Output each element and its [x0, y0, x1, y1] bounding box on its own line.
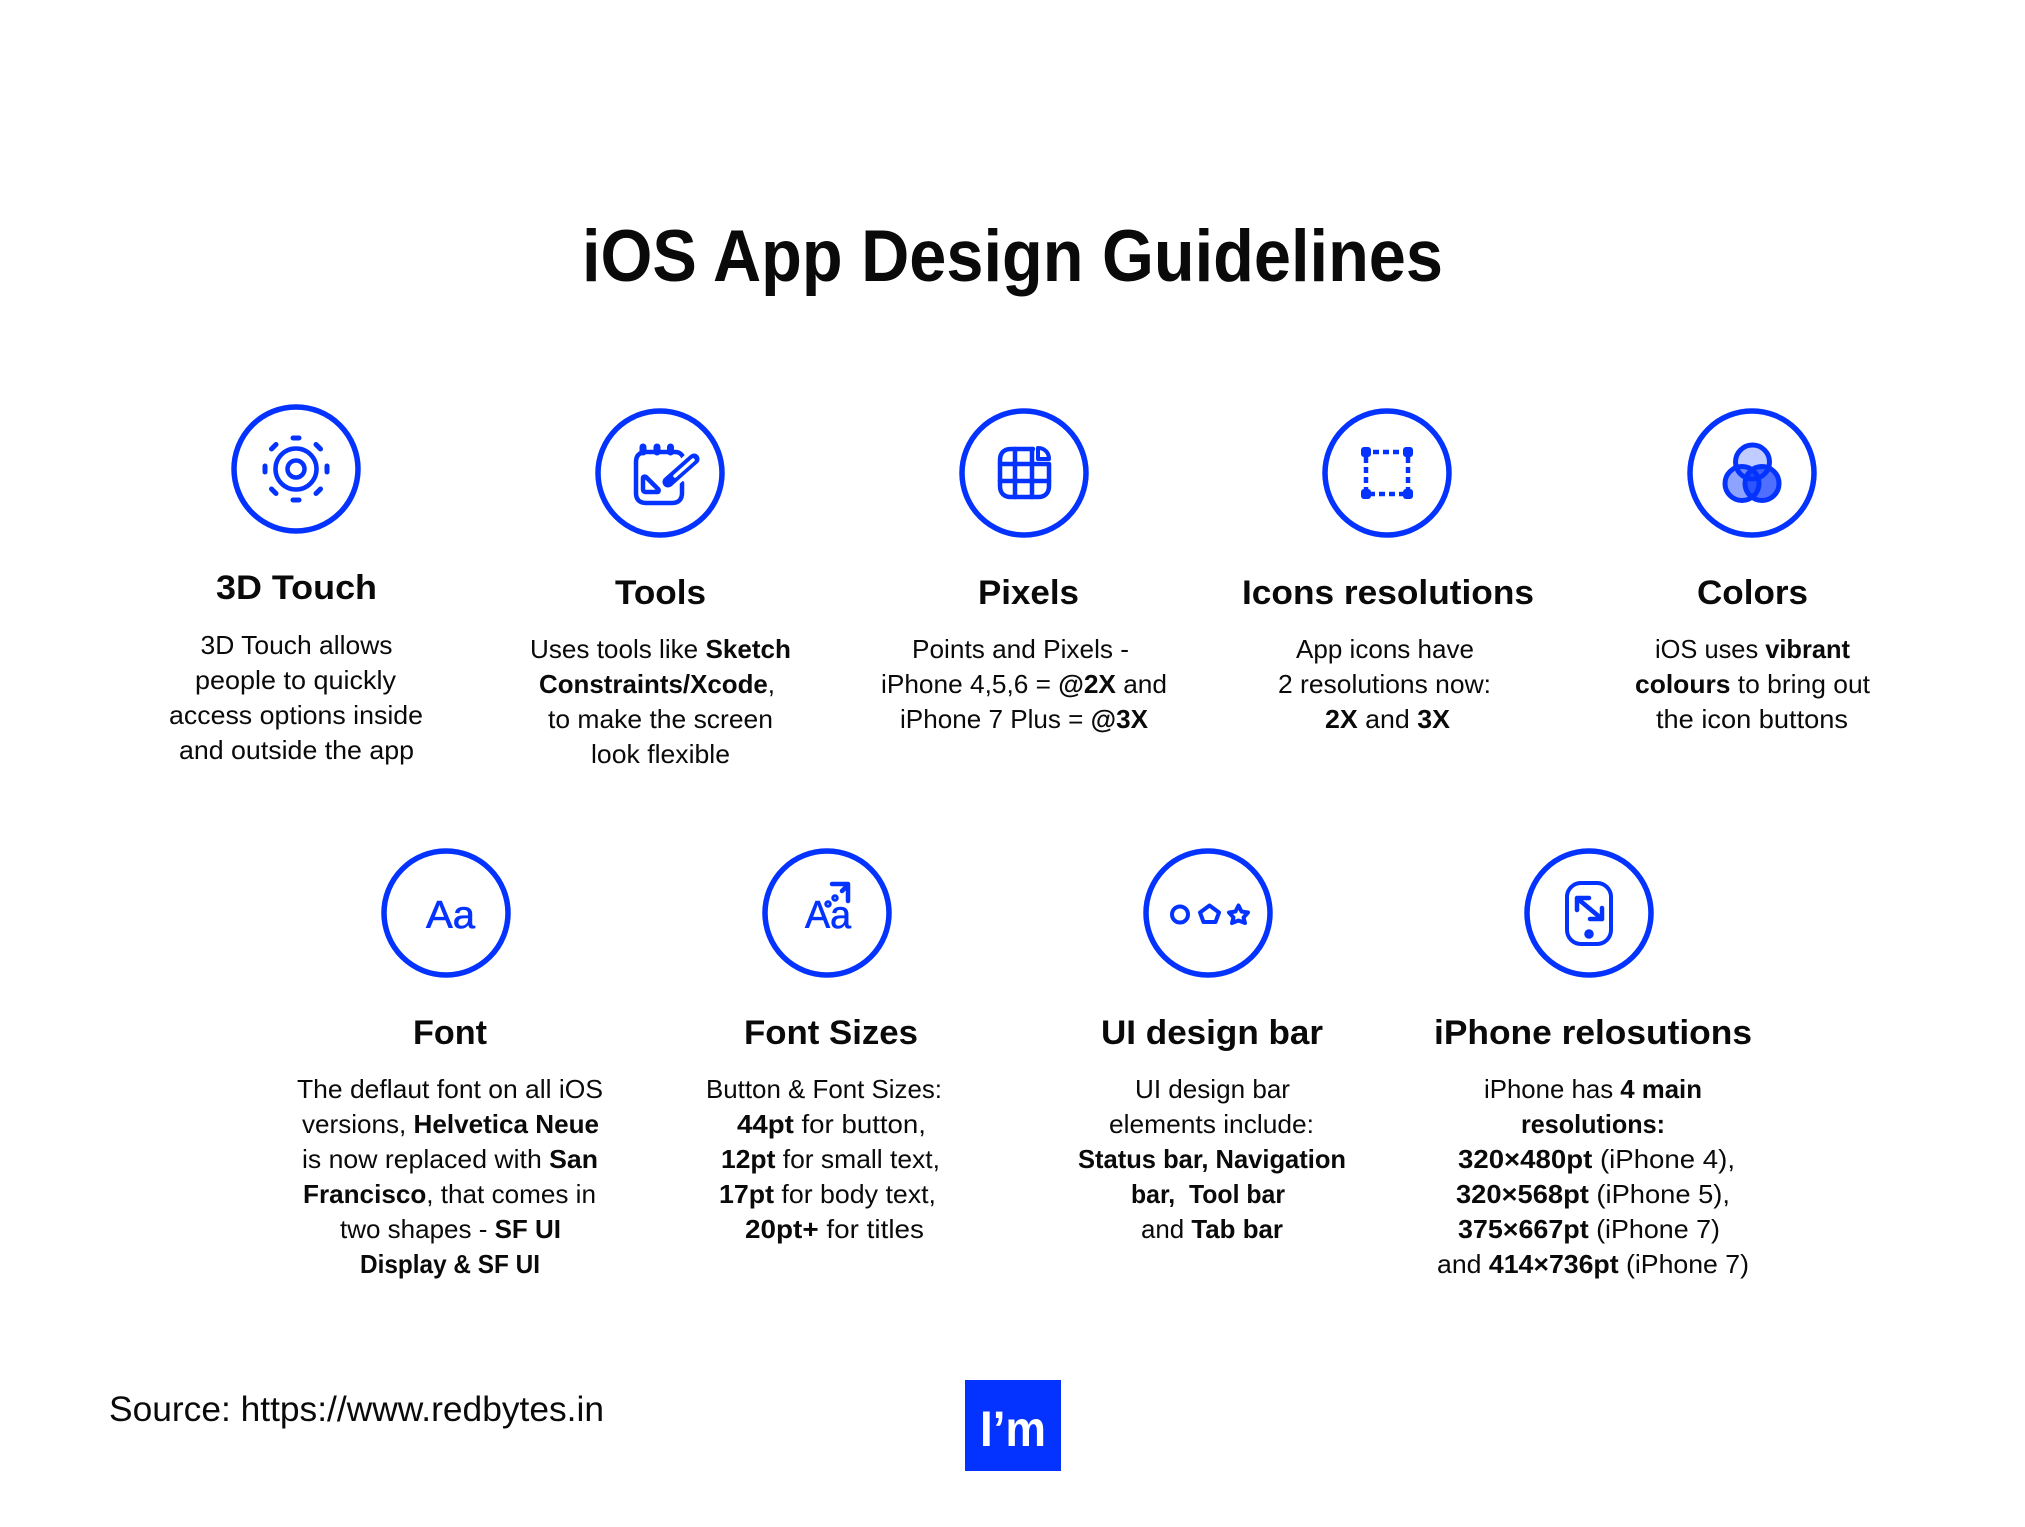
description: Points and Pixels -: [912, 634, 1129, 664]
description: [297, 1074, 603, 1279]
heading: Icons resolutions: [1242, 574, 1534, 612]
description: is now replaced with San: [302, 1144, 598, 1174]
description: [169, 630, 423, 765]
description: the icon buttons: [1656, 704, 1848, 734]
panel: iPhone relosutions: [1434, 851, 1752, 1279]
description: iPhone 4,5,6 = @2X and: [881, 669, 1167, 699]
logo: [965, 1380, 1061, 1471]
icon: pixel grid: [962, 411, 1086, 535]
description: two shapes - SF UI: [340, 1214, 561, 1244]
description: Uses tools like Sketch: [530, 634, 791, 664]
description: [530, 634, 791, 769]
icon: circle, pentagon, star: [1146, 851, 1270, 975]
heading: UI design bar: [1101, 1014, 1323, 1052]
description: App icons have: [1296, 634, 1474, 664]
description: UI design bar: [1135, 1074, 1290, 1104]
description: 20pt+ for titles: [745, 1214, 924, 1244]
description: 2X and 3X: [1325, 704, 1451, 734]
logo: I’m: [980, 1401, 1046, 1457]
panel: Font Sizes: [706, 851, 942, 1244]
panel: Icons resolutions: [1242, 411, 1534, 734]
icon: 3D Touch: [234, 407, 358, 531]
description: versions, Helvetica Neue: [302, 1109, 599, 1139]
panel: Colors: [1635, 411, 1871, 734]
description: and Tab bar: [1141, 1214, 1283, 1244]
icon: Aa: [384, 851, 508, 975]
description: to make the screen: [548, 704, 773, 734]
panel: Tools: [530, 411, 791, 769]
description: 320×480pt (iPhone 4),: [1458, 1144, 1735, 1174]
panel: UI design bar: [1078, 851, 1346, 1244]
description: [1437, 1074, 1749, 1279]
icon: notepad and pen: [598, 411, 722, 535]
description: Francisco, that comes in: [303, 1179, 596, 1209]
icon: Aa with growth arrow: [765, 851, 889, 975]
description: 3D Touch allows: [200, 630, 392, 660]
heading: Font: [413, 1014, 487, 1052]
description: Constraints/Xcode,: [539, 669, 775, 699]
heading: iPhone relosutions: [1434, 1014, 1752, 1052]
heading: 3D Touch: [216, 569, 377, 607]
description: Status bar, Navigation: [1078, 1144, 1346, 1174]
source line: Source: https://www.redbytes.in: [109, 1390, 604, 1429]
description: bar, Tool bar: [1131, 1179, 1285, 1209]
description: elements include:: [1109, 1109, 1314, 1139]
icon: phone with resize arrow: [1527, 851, 1651, 975]
description: 12pt for small text,: [721, 1144, 940, 1174]
description: resolutions:: [1521, 1109, 1665, 1139]
heading: Pixels: [978, 574, 1079, 612]
description: 2 resolutions now:: [1278, 669, 1491, 699]
description: Display & SF UI: [360, 1249, 540, 1279]
description: iOS uses vibrant: [1655, 634, 1850, 664]
heading: Tools: [615, 574, 706, 612]
description: colours to bring out: [1635, 669, 1871, 699]
icon: dashed artboard: [1325, 411, 1449, 535]
description: access options inside: [169, 700, 423, 730]
description: people to quickly: [195, 665, 396, 695]
description: 44pt for button,: [737, 1109, 926, 1139]
description: The deflaut font on all iOS: [297, 1074, 603, 1104]
title: iOS App Design Guidelines: [582, 216, 1443, 297]
heading: Colors: [1697, 574, 1808, 612]
description: and outside the app: [179, 735, 414, 765]
icon: overlapping colour circles: [1690, 411, 1814, 535]
description: iPhone has 4 main: [1484, 1074, 1702, 1104]
description: 17pt for body text,: [719, 1179, 936, 1209]
heading: Font Sizes: [744, 1014, 918, 1052]
panel: Pixels: [881, 411, 1167, 734]
description: [1078, 1074, 1346, 1244]
description: look flexible: [591, 739, 730, 769]
description: [1278, 634, 1491, 734]
icon: Aa: Aa: [426, 894, 475, 937]
description: [1635, 634, 1871, 734]
description: [881, 634, 1167, 734]
description: Button & Font Sizes:: [706, 1074, 942, 1104]
description: iPhone 7 Plus = @3X: [900, 704, 1149, 734]
icon: Aa with growth arrow: Aa: [805, 894, 851, 937]
description: 375×667pt (iPhone 7): [1458, 1214, 1720, 1244]
panel: Font: [297, 851, 603, 1279]
panel: 3D Touch: [169, 407, 423, 765]
description: 320×568pt (iPhone 5),: [1456, 1179, 1730, 1209]
description: and 414×736pt (iPhone 7): [1437, 1249, 1749, 1279]
description: [706, 1074, 942, 1244]
